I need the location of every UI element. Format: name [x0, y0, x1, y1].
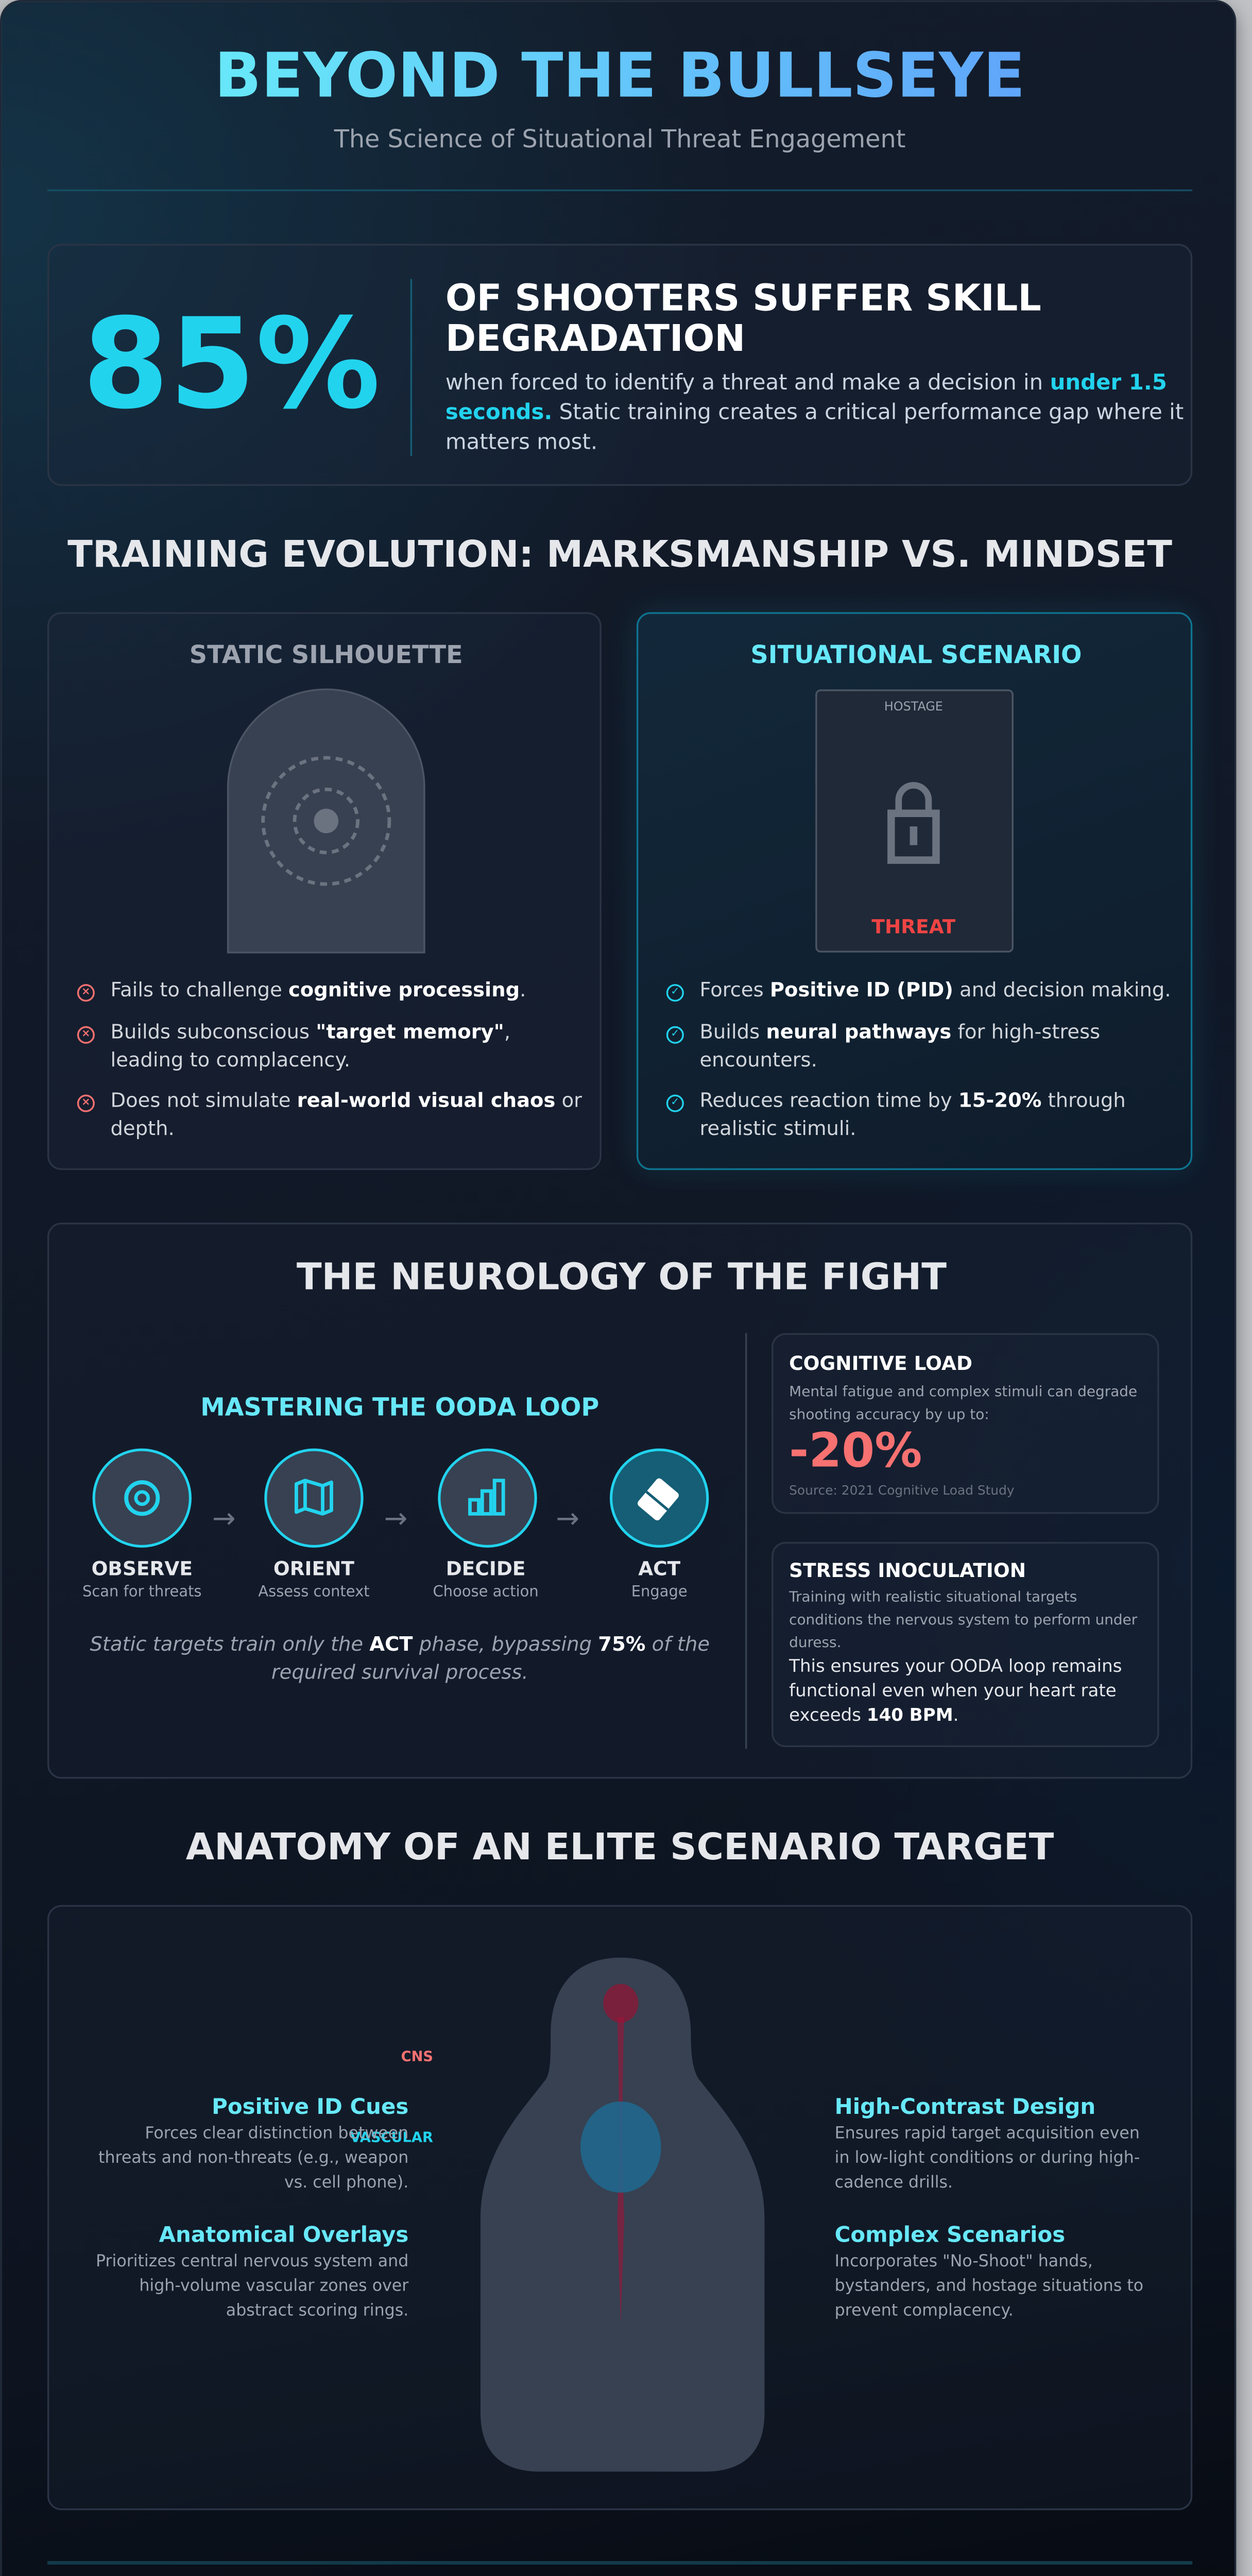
bullet list: benefits: Forces Positive ID (PID) and decision making.: [700, 979, 1171, 1002]
subheading: OODA loop: MASTERING THE OODA LOOP: [200, 1395, 599, 1422]
feature: anatomical overlays: Prioritizes central nervous system and: [96, 2252, 408, 2272]
bullet list: benefits: [666, 979, 1171, 1140]
OODA labels: Assess context: [258, 1584, 370, 1602]
OODA labels: [82, 1557, 688, 1602]
bullet list: benefits: Builds neural pathways for high-stress encounters.: [700, 1021, 1100, 1072]
italic note: Static targets train only the ACT phase, bypassing 75% of the: [90, 1633, 710, 1656]
panel: neurology: [47, 1223, 1192, 1778]
callout: cognitive load: [771, 1333, 1159, 1514]
icon: observe: [93, 1449, 192, 1548]
stat description: [445, 370, 1184, 454]
feature: high-contrast design: [835, 2094, 1140, 2193]
section heading: training evolution: TRAINING EVOLUTION: MARKSMANSHIP VS. MINDSET: [67, 533, 1172, 575]
big stat 85%: 85%: [82, 291, 381, 437]
panel: key stat: [47, 244, 1192, 486]
label: VASCULAR: VASCULAR: [350, 2129, 433, 2145]
feature: complex scenarios: bystanders, and hostage situations to: [835, 2277, 1143, 2296]
bullet list: benefits: Reduces reaction time by 15-20% through realistic stimuli.: [700, 1089, 1126, 1140]
feature: positive ID cues: threats and non-threats (e.g., weapon: [98, 2149, 408, 2168]
OODA labels: DECIDE: [446, 1557, 526, 1581]
title: BEYOND THE BULLSEYE: [215, 42, 1025, 112]
callout: stress inoculation: [771, 1542, 1159, 1747]
heading: THE NEUROLOGY OF THE FIGHT: [297, 1256, 947, 1298]
feature: complex scenarios: Complex Scenarios: [835, 2223, 1065, 2247]
feature: high-contrast design: in low-light conditions or during high-: [835, 2149, 1140, 2168]
feature: anatomical overlays: abstract scoring rings.: [226, 2301, 408, 2321]
callout: stress inoculation: Training with realistic situational targets: [789, 1587, 1077, 1605]
illustration: silhouette with rings: [227, 688, 425, 953]
bullet list: cons: ×: [81, 1028, 90, 1040]
OODA labels: Engage: [631, 1584, 688, 1602]
feature: high-contrast design: High-Contrast Design: [835, 2094, 1095, 2119]
feature: anatomical overlays: [96, 2223, 409, 2321]
feature: anatomical overlays: Anatomical Overlays: [159, 2223, 408, 2247]
panel heading: SITUATIONAL SCENARIO: [750, 642, 1082, 670]
illustration: scenario target silhouette: [481, 1958, 764, 2472]
section heading: anatomy: ANATOMY OF AN ELITE SCENARIO TARGET: [186, 1826, 1054, 1868]
callout: cognitive load: Mental fatigue and complex stimuli can degrade: [789, 1382, 1137, 1400]
panel heading: STATIC SILHOUETTE: [190, 642, 463, 670]
feature: high-contrast design: Ensures rapid target acquisition even: [835, 2124, 1140, 2144]
illustration: hostage/threat target: [815, 689, 1014, 953]
feature: complex scenarios: prevent complacency.: [835, 2301, 1014, 2321]
stat heading: OF SHOOTERS SUFFER SKILL: [445, 277, 1041, 319]
callout: stress inoculation: duress.: [789, 1633, 841, 1651]
callout: cognitive load: Source: 2021 Cognitive Load Study: [789, 1482, 1015, 1498]
illustration: hostage/threat target: THREAT: [871, 916, 955, 939]
feature: complex scenarios: [835, 2223, 1143, 2321]
bullet list: cons: ×: [81, 986, 90, 998]
callout: cognitive load: shooting accuracy by up to:: [789, 1405, 989, 1422]
OODA labels: ACT: [638, 1557, 680, 1581]
italic note: required survival process.: [271, 1661, 528, 1684]
stat heading: DEGRADATION: [445, 317, 745, 360]
illustration: hostage/threat target: HOSTAGE: [884, 700, 943, 714]
icon: decide: [438, 1449, 537, 1548]
bullet list: cons: [77, 979, 582, 1140]
icon: act: [610, 1449, 709, 1548]
feature: positive ID cues: Forces clear distinction between: [145, 2124, 408, 2144]
panel: static silhouette: [47, 612, 602, 1170]
OODA loop diagram: [93, 1449, 709, 1548]
callout: stress inoculation: STRESS INOCULATION: [789, 1560, 1026, 1582]
label: CNS: CNS: [401, 2049, 433, 2064]
callout: stress inoculation: exceeds 140 BPM.: [789, 1707, 958, 1726]
stat description: seconds. Static training creates a critical performance gap where it: [445, 400, 1184, 425]
callout: cognitive load: COGNITIVE LOAD: [789, 1352, 972, 1375]
panel: situational scenario: [637, 612, 1192, 1170]
italic note: [90, 1633, 710, 1684]
feature: high-contrast design: cadence drills.: [835, 2174, 953, 2193]
callout: stress inoculation: conditions the nervous system to perform under: [789, 1611, 1137, 1628]
stat heading: [445, 277, 1041, 360]
bullet list: cons: Does not simulate real-world visual chaos or depth.: [111, 1089, 582, 1140]
OODA labels: OBSERVE: [92, 1557, 193, 1581]
feature: anatomical overlays: high-volume vascular zones over: [139, 2277, 408, 2296]
OODA labels: ORIENT: [273, 1557, 354, 1581]
feature: positive ID cues: vs. cell phone).: [284, 2174, 408, 2193]
callout: stress inoculation: functional even when your heart rate: [789, 1682, 1117, 1702]
feature: complex scenarios: Incorporates "No-Shoot" hands,: [835, 2252, 1093, 2272]
bullet list: cons: Builds subconscious "target memory", leading to complacency.: [111, 1021, 510, 1072]
callout: stress inoculation: This ensures your OODA loop remains: [789, 1658, 1122, 1677]
bullet list: benefits: ✓: [671, 986, 679, 998]
stat description: matters most.: [445, 430, 597, 454]
bullet list: cons: Fails to challenge cognitive processing.: [111, 979, 526, 1002]
OODA labels: Choose action: [433, 1584, 539, 1602]
bullet list: cons: ×: [81, 1096, 90, 1109]
callout: cognitive load: -20%: [789, 1425, 922, 1479]
icon: orient: [264, 1449, 364, 1548]
bullet list: benefits: ✓: [671, 1096, 679, 1109]
feature: positive ID cues: Positive ID Cues: [212, 2094, 408, 2119]
bullet list: benefits: ✓: [671, 1028, 679, 1040]
arrow: →: [212, 1502, 236, 1535]
OODA labels: Scan for threats: [82, 1584, 201, 1602]
stat description: when forced to identify a threat and make a decision in under 1.5: [445, 370, 1167, 395]
subtitle: The Science of Situational Threat Engagement: [334, 126, 905, 155]
feature: positive ID cues: [98, 2094, 408, 2193]
arrow: →: [384, 1502, 407, 1535]
panel: anatomy: [47, 1905, 1192, 2510]
arrow: →: [556, 1502, 579, 1535]
